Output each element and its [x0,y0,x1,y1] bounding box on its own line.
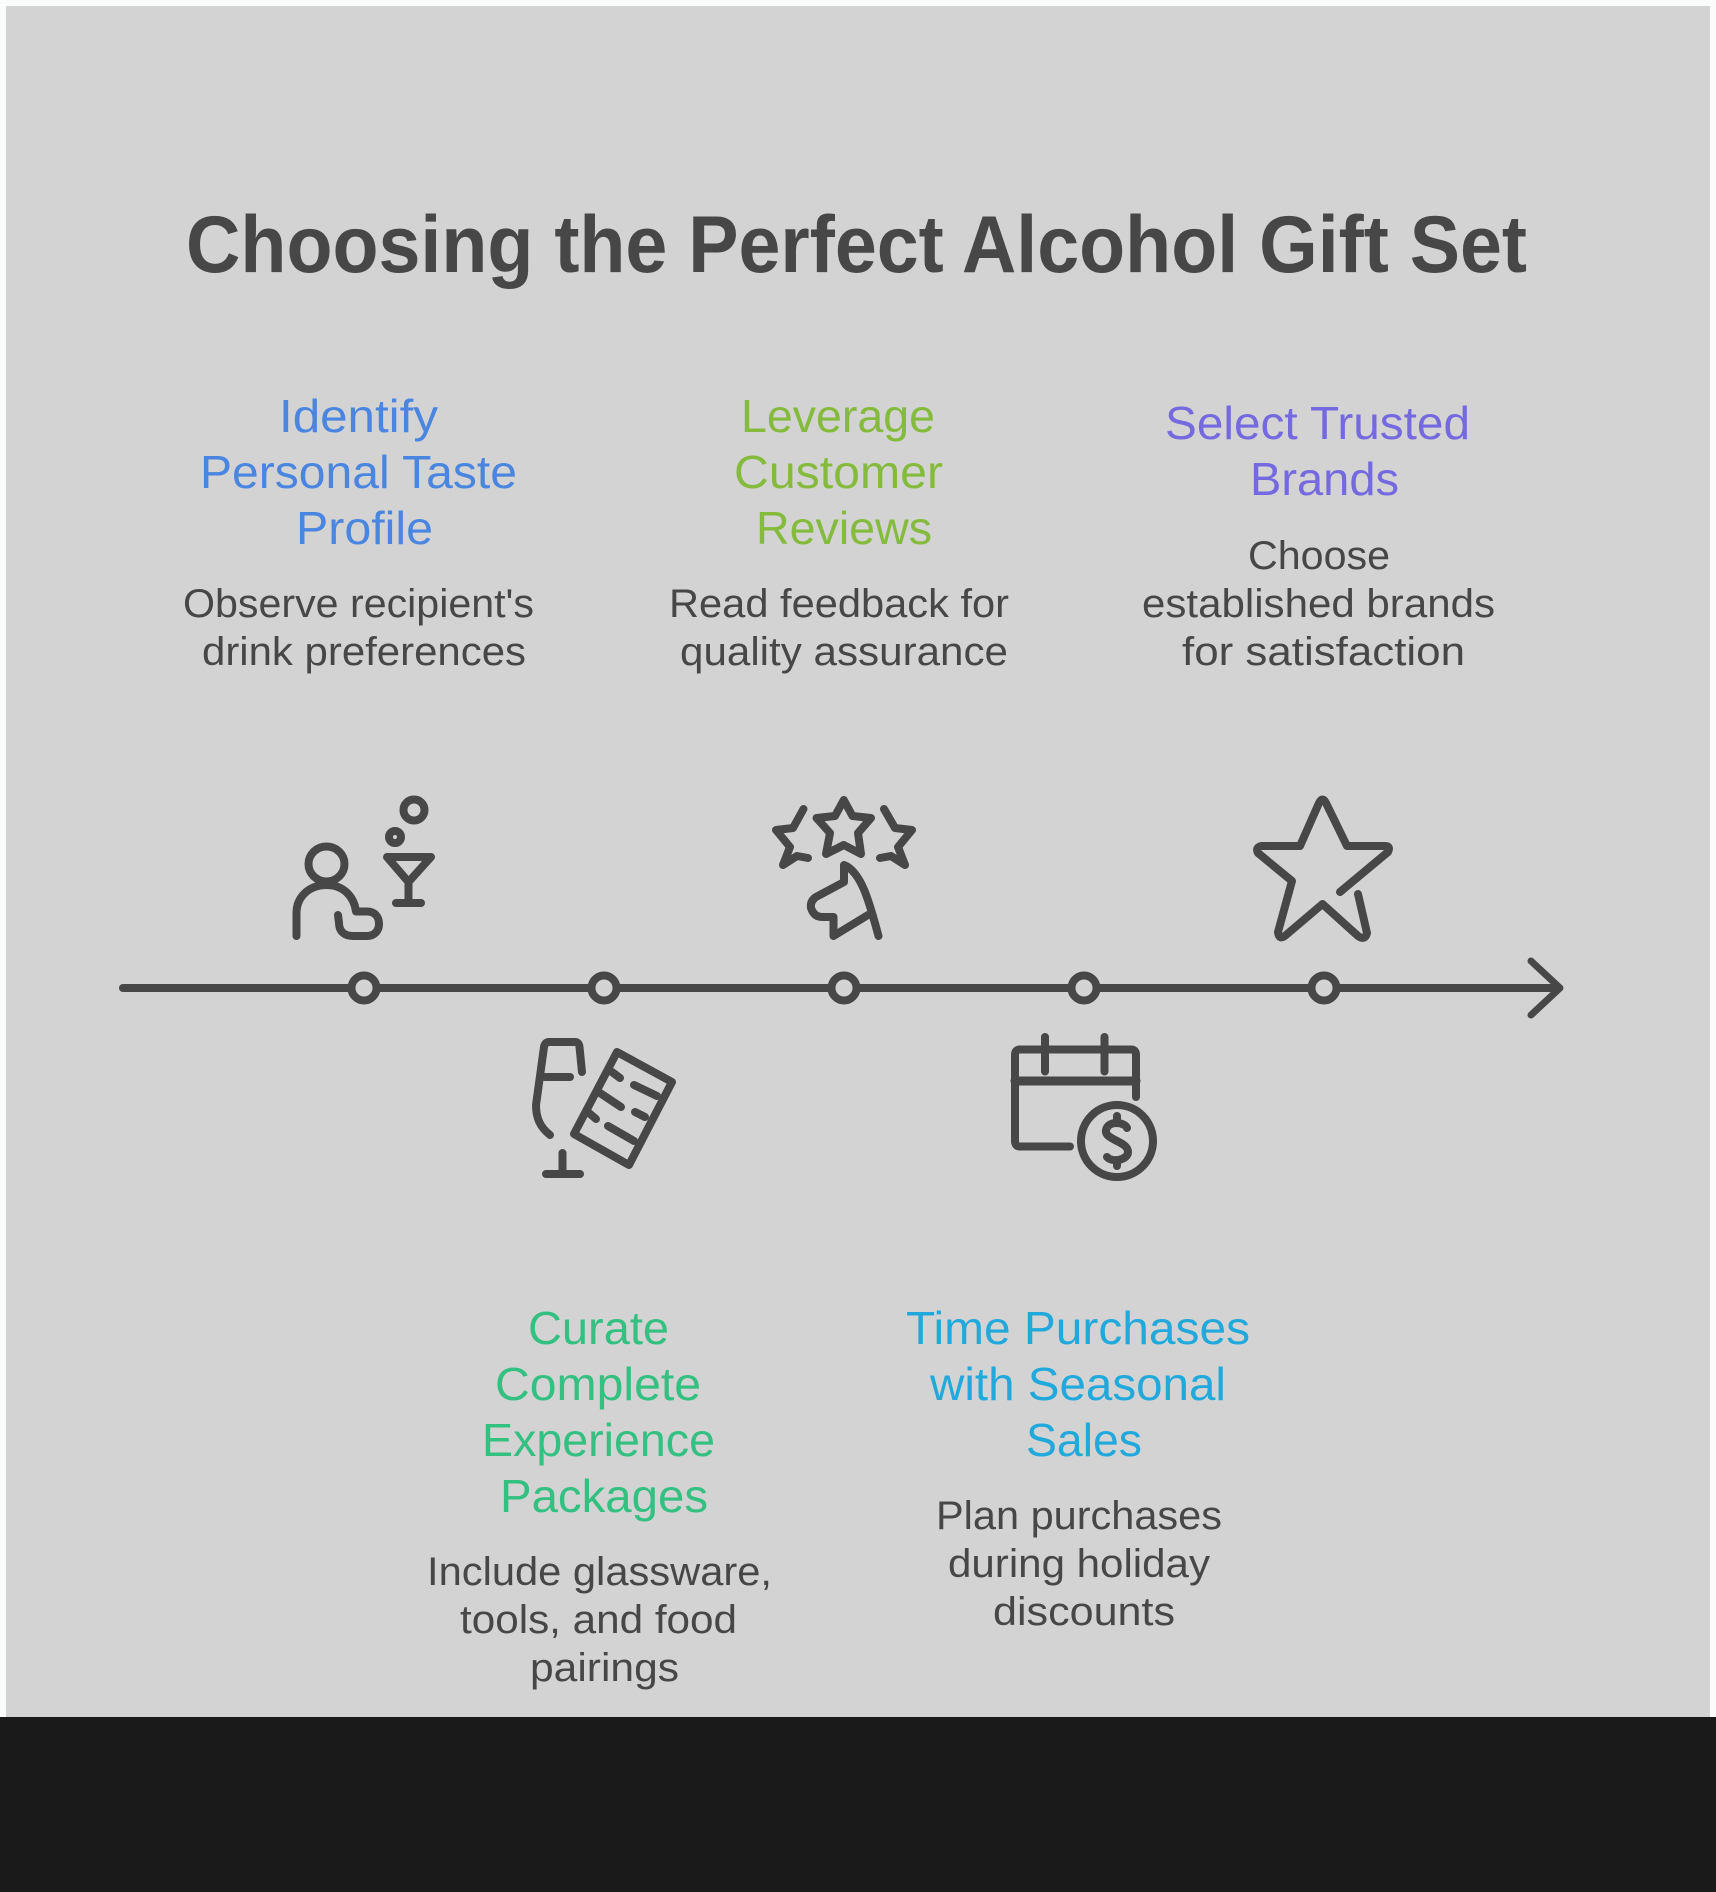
description: Observe recipient's drink preferences: drink preferences [202,630,526,674]
icon: star [1257,800,1389,938]
heading: Leverage Customer Reviews: Leverage [741,390,935,442]
heading: Curate Complete Experience Packages: Curate [528,1302,669,1354]
heading: Leverage Customer Reviews [734,390,943,554]
step text: Leverage Customer Reviews [669,390,1009,674]
heading: Identify Personal Taste Profile: Personal Taste [200,446,517,498]
description: Include glassware, tools, and food pairings: tools, and food [460,1598,737,1642]
timeline arrow with step markers [123,961,1560,1015]
description: Plan purchases during holiday discounts: Plan purchases [936,1494,1222,1538]
description: Include glassware, tools, and food pairings: pairings [530,1646,679,1690]
step text: Select Trusted Brands [1142,397,1495,674]
description: Plan purchases during holiday discounts [936,1494,1222,1634]
heading: Select Trusted Brands: Brands [1250,453,1399,505]
description: Read feedback for quality assurance: quality assurance [680,630,1008,674]
description: Observe recipient's drink preferences [183,582,534,674]
description: Choose established brands for satisfaction [1142,534,1495,674]
heading: Identify Personal Taste Profile: Profile [296,502,433,554]
icon: calendar with dollar coin [1015,1037,1153,1177]
description: Plan purchases during holiday discounts: discounts [993,1590,1175,1634]
heading: Curate Complete Experience Packages: Complete [495,1358,701,1410]
footer: dark band [0,1717,1716,1892]
description: Include glassware, tools, and food pairings: Include glassware, [427,1550,772,1594]
heading: Curate Complete Experience Packages: Experience [482,1414,715,1466]
heading: Time Purchases with Seasonal Sales: Sales [1026,1414,1142,1466]
title: Choosing the Perfect Alcohol Gift Set [186,200,1527,290]
description: Read feedback for quality assurance [669,582,1009,674]
heading: Identify Personal Taste Profile: Identify [279,390,438,442]
icon: glass and menu [536,1042,672,1174]
description: Choose established brands for satisfaction: for satisfaction [1182,630,1465,674]
arrow: timeline line and head [123,961,1560,1015]
description: Include glassware, tools, and food pairings [427,1550,772,1690]
heading: Curate Complete Experience Packages: Packages [500,1470,708,1522]
heading: Leverage Customer Reviews: Customer [734,446,943,498]
icon: review stars and hand [776,800,912,936]
description: Plan purchases during holiday discounts: during holiday [948,1542,1210,1586]
step text: Curate Complete Experience Packages [427,1302,772,1690]
heading: Leverage Customer Reviews: Reviews [756,502,932,554]
icon: person with cocktail [296,800,431,936]
heading: Select Trusted Brands [1165,397,1470,505]
heading: Select Trusted Brands: Select Trusted [1165,397,1470,449]
step text: Identify Personal Taste Profile [183,390,534,674]
heading: Time Purchases with Seasonal Sales: with Seasonal [929,1358,1226,1410]
heading: Curate Complete Experience Packages [482,1302,715,1522]
heading: Identify Personal Taste Profile [200,390,517,554]
step text: Time Purchases with Seasonal Sales [906,1302,1250,1634]
step markers [352,976,1336,1000]
description: Observe recipient's drink preferences: Observe recipient's [183,582,534,626]
description: Choose established brands for satisfaction: Choose [1248,534,1390,578]
heading: Time Purchases with Seasonal Sales: Time Purchases [906,1302,1250,1354]
description: Choose established brands for satisfaction: established brands [1142,582,1495,626]
heading: Time Purchases with Seasonal Sales [906,1302,1250,1466]
description: Read feedback for quality assurance: Read feedback for [669,582,1009,626]
